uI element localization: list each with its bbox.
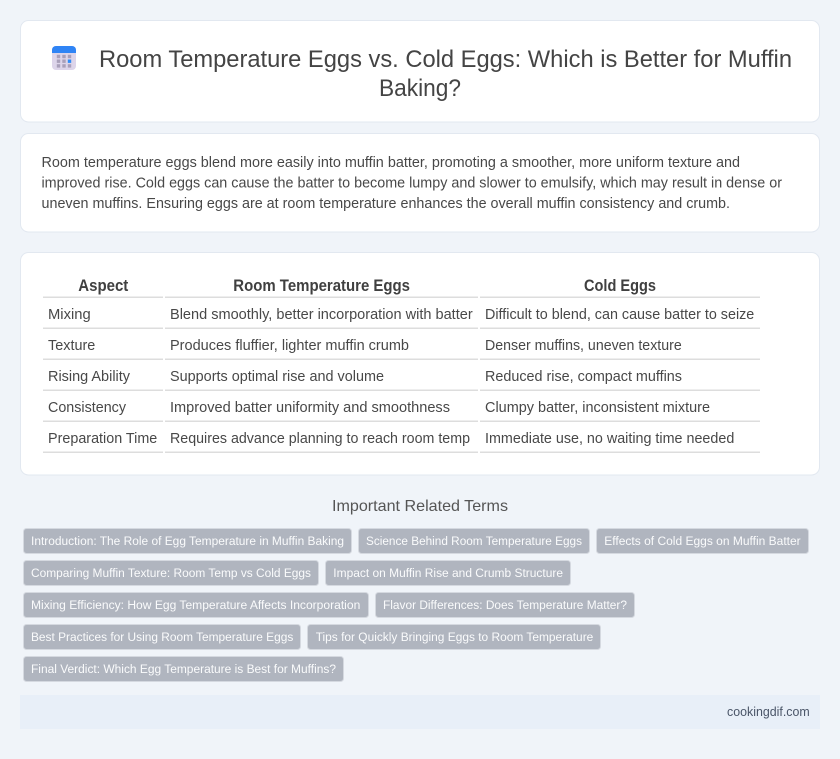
related term tags bbox=[24, 528, 808, 682]
tag: effects bbox=[596, 528, 808, 554]
panel: header bbox=[20, 20, 820, 122]
table row: preparation time: Requires advance planning to reach room temp bbox=[170, 431, 470, 447]
table row: rising ability bbox=[43, 369, 760, 391]
table header row bbox=[43, 277, 760, 298]
table header row: Cold Eggs bbox=[584, 277, 656, 295]
text block: introduction paragraph bbox=[42, 155, 782, 212]
tag: tips bbox=[308, 624, 600, 650]
tag: comparing texture: Comparing Muffin Texture: Room Temp vs Cold Eggs bbox=[31, 566, 311, 580]
tag: mixing efficiency: Mixing Efficiency: How Egg Temperature Affects Incorporation bbox=[31, 598, 360, 612]
panel: introduction bbox=[20, 134, 820, 232]
table row: preparation time bbox=[43, 431, 760, 453]
title: Room Temperature Eggs vs. Cold Eggs: Which is Better for Muffin bbox=[99, 46, 792, 73]
table row: rising ability: Reduced rise, compact muffins bbox=[485, 369, 682, 385]
tag: science bbox=[358, 528, 590, 554]
tag: effects: Effects of Cold Eggs on Muffin Batter bbox=[604, 534, 801, 548]
tag: introduction bbox=[24, 528, 352, 554]
table row: consistency: Improved batter uniformity and smoothness bbox=[170, 400, 450, 416]
table row: texture bbox=[43, 338, 760, 360]
tag: final verdict bbox=[24, 656, 344, 682]
text block: introduction paragraph: improved rise. Cold eggs can cause the batter to become lumpy and slower to emulsify, which may result in dense or bbox=[42, 176, 782, 192]
tag: flavor bbox=[376, 592, 634, 618]
tag: best practices bbox=[24, 624, 300, 650]
tag: introduction: Introduction: The Role of Egg Temperature in Muffin Baking bbox=[31, 534, 344, 548]
footer bbox=[20, 695, 820, 729]
table row: rising ability: Supports optimal rise and volume bbox=[170, 369, 384, 385]
tag: impact: Impact on Muffin Rise and Crumb Structure bbox=[333, 566, 563, 580]
text block: introduction paragraph: Room temperature eggs blend more easily into muffin batter, promoting a smoother, more uniform texture and bbox=[42, 155, 740, 171]
tag: flavor: Flavor Differences: Does Temperature Matter? bbox=[383, 598, 627, 612]
tag: best practices: Best Practices for Using Room Temperature Eggs bbox=[31, 630, 293, 644]
table row: texture: Denser muffins, uneven texture bbox=[485, 338, 682, 354]
table header row: Room Temperature Eggs bbox=[233, 277, 410, 295]
tag: mixing efficiency bbox=[24, 592, 368, 618]
table row: consistency: Consistency bbox=[48, 400, 127, 416]
table row: mixing: Mixing bbox=[48, 307, 91, 323]
tag: comparing texture bbox=[24, 560, 318, 586]
table row: texture: Texture bbox=[48, 338, 95, 354]
table row: consistency: Clumpy batter, inconsistent mixture bbox=[485, 400, 710, 416]
table row: texture: Produces fluffier, lighter muffin crumb bbox=[170, 338, 409, 354]
table header row: Aspect bbox=[78, 277, 129, 295]
title bbox=[99, 46, 792, 102]
tag: science: Science Behind Room Temperature Eggs bbox=[366, 534, 582, 548]
tag: final verdict: Final Verdict: Which Egg Temperature is Best for Muffins? bbox=[31, 662, 336, 676]
table row: consistency bbox=[43, 400, 760, 422]
table row: rising ability: Rising Ability bbox=[48, 369, 131, 385]
title: Baking? bbox=[379, 75, 461, 102]
table row: mixing: Difficult to blend, can cause batter to seize bbox=[485, 307, 754, 323]
table row: mixing bbox=[43, 307, 760, 329]
table row: preparation time: Preparation Time bbox=[48, 431, 157, 447]
panel: comparison table bbox=[20, 252, 820, 475]
tag: impact bbox=[326, 560, 570, 586]
text block: introduction paragraph: uneven muffins. Ensuring eggs are at room temperature enhances the overall muffin consistency and crumb. bbox=[42, 196, 730, 212]
tag: tips: Tips for Quickly Bringing Eggs to Room Temperature bbox=[316, 630, 593, 644]
table row: mixing: Blend smoothly, better incorporation with batter bbox=[170, 307, 473, 323]
footer: cookingdif.com bbox=[727, 704, 810, 719]
icon: calendar bbox=[52, 46, 76, 70]
table row: preparation time: Immediate use, no waiting time needed bbox=[485, 431, 734, 447]
heading: important related terms: Important Related Terms bbox=[332, 498, 508, 515]
